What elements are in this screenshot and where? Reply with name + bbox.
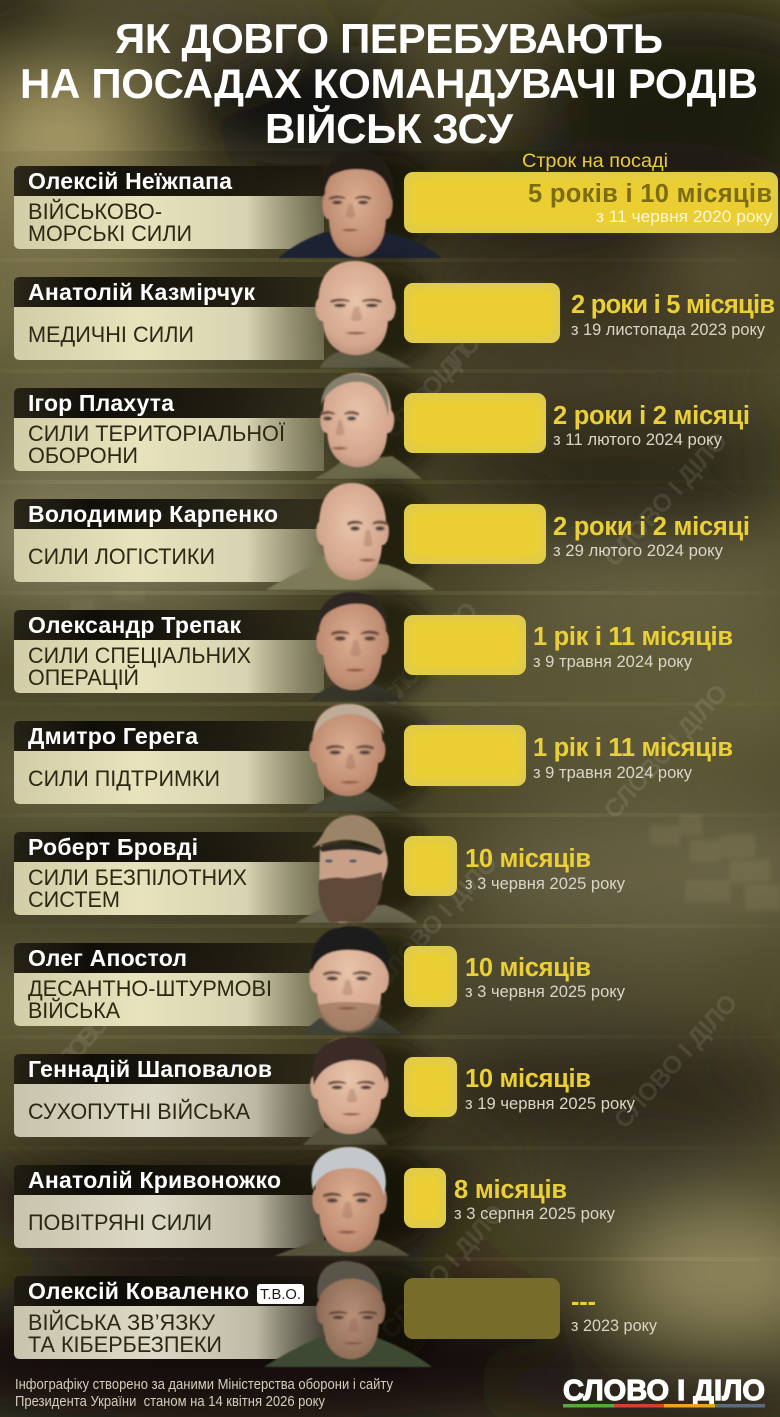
row 4: Karpenko [14,483,750,590]
name bar [14,610,324,640]
service label [14,751,324,804]
service label [14,307,324,360]
service label [14,1084,324,1137]
portrait [314,373,422,479]
name: Дмитро Герега [28,723,198,749]
service: ОБОРОНИ [28,443,138,468]
row 1: Neizhpapa [14,151,778,258]
duration bar [404,836,457,896]
duration bar [404,725,526,786]
service [28,1310,222,1357]
service: СИЛИ СПЕЦІАЛЬНИХ [28,643,251,668]
portrait [296,815,418,923]
duration: 2 роки і 2 місяці [553,513,750,541]
row 2: Kazmirchuk [14,261,775,368]
name: Олексій Неїжпапа [28,168,232,194]
name: Анатолій Казмірчук [28,279,255,305]
duration: 8 місяців [454,1176,567,1204]
watermarks [44,329,743,1344]
service: СУХОПУТНІ ВІЙСЬКА [28,1099,250,1124]
name: Олег Апостол [28,945,187,971]
row 8: Apostol [14,926,626,1034]
duration: 1 рік і 11 місяців [533,623,733,651]
row 10: Kryvonozhko [14,1147,616,1256]
name bar [14,166,324,196]
duration: --- [571,1288,596,1316]
portrait [303,1037,389,1145]
service: СИЛИ ЛОГІСТИКИ [28,544,215,569]
portrait shadow [335,485,435,585]
duration bar [404,504,546,564]
duration: 10 місяців [465,845,591,873]
service label [14,1195,324,1248]
portrait [274,1147,410,1256]
duration bar [404,1278,560,1339]
name: Роберт Бровді [28,834,198,860]
service label [14,862,324,915]
portrait [266,483,435,590]
name bar [14,721,324,751]
duration bar [404,946,457,1007]
title [20,15,758,152]
service: СИЛИ ПІДТРИМКИ [28,766,220,791]
watermarks: СЛОВО І ДІЛО [376,1199,510,1344]
portrait [310,592,402,701]
row 7: Brovdi [14,815,626,923]
row 9: Shapovalov [14,1037,636,1145]
portrait shadow [335,1040,435,1140]
column heading: Строк на посаді [522,150,668,172]
duration: 1 рік і 11 місяців [533,734,733,762]
title: ВІЙСЬК ЗСУ [265,104,514,152]
watermarks: СЛОВО І ДІЛО [599,427,733,572]
watermarks: СЛОВО І ДІЛО [379,329,486,444]
service: ВІЙСЬКОВО- [28,199,162,224]
name: Олексій Коваленко [28,1278,249,1304]
name bar [14,277,324,307]
service: МЕДИЧНІ СИЛИ [28,322,194,347]
service label [14,196,324,249]
date: з 11 червня 2020 року [596,208,773,226]
portrait shadow [335,155,435,255]
title: ЯК ДОВГО ПЕРЕБУВАЮТЬ [115,15,663,62]
service [28,421,286,468]
service [28,199,192,246]
portrait shadow [335,818,435,918]
service [28,865,247,912]
name: Геннадій Шаповалов [28,1056,272,1082]
portrait [303,926,402,1034]
date: з 11 лютого 2024 року [553,431,723,449]
row 6: Gerega [14,704,733,812]
name bar [14,499,324,529]
service [28,976,272,1023]
duration: 10 місяців [465,954,591,982]
service [28,643,251,690]
duration: 5 років і 10 місяців [528,180,772,208]
footer note: Президента України станом на 14 квітня 2026 року [15,1394,326,1410]
portrait shadow [335,375,435,475]
name: Ігор Плахута [28,390,174,416]
duration: 10 місяців [465,1065,591,1093]
service label [14,418,324,471]
service: СИСТЕМ [28,887,120,912]
date: з 9 травня 2024 року [533,764,693,782]
portrait [278,151,442,258]
portrait shadow [335,265,435,365]
duration: 2 роки і 5 місяців [571,291,775,319]
portrait [315,261,412,368]
portrait shadow [335,1265,435,1365]
footer note [15,1377,394,1410]
service label [14,529,324,582]
duration bar [404,393,546,453]
name: Володимир Карпенко [28,501,278,527]
service: ТА КІБЕРБЕЗПЕКИ [28,1332,222,1357]
name: Анатолій Кривоножко [28,1167,281,1193]
watermarks: СЛОВО І ДІЛО [609,989,743,1134]
name bar [14,1165,324,1195]
name bar [14,1054,324,1084]
duration bar [404,1057,457,1117]
portrait shadow [335,706,435,806]
service: ВІЙСЬКА ЗВ’ЯЗКУ [28,1310,216,1335]
date: з 19 листопада 2023 року [571,321,766,339]
portrait [264,1261,432,1367]
row 3: Plakhuta [14,373,750,479]
duration bar [404,1168,446,1228]
watermarks: СЛОВО І ДІЛО [376,597,483,712]
service: ПОВІТРЯНІ СИЛИ [28,1210,212,1235]
portrait [304,704,402,812]
date: з 3 червня 2025 року [465,875,626,893]
name bar [14,388,324,418]
portrait shadow [335,930,435,1030]
service: СИЛИ БЕЗПІЛОТНИХ [28,865,247,890]
watermarks: СЛОВО І ДІЛО [369,849,503,994]
digital camo squares [40,585,780,910]
service label [14,1306,324,1359]
row 5: Trepak [14,592,733,701]
title: НА ПОСАДАХ КОМАНДУВАЧІ РОДІВ [20,60,758,107]
row 11: Kovalenko [14,1261,658,1367]
duration bar [404,615,526,675]
date: з 3 червня 2025 року [465,983,626,1001]
service: ОПЕРАЦІЙ [28,665,139,690]
duration bar [404,172,778,233]
name bar [14,943,324,973]
date: з 9 травня 2024 року [533,653,693,671]
date: з 3 серпня 2025 року [454,1205,616,1223]
watermarks: СЛОВО І ДІЛО [599,679,733,824]
name bar [14,832,324,862]
service: ДЕСАНТНО-ШТУРМОВІ [28,976,272,1001]
footer note: Інфографіку створено за даними Міністерства оборони і сайту [15,1377,394,1393]
name bar [14,1276,324,1306]
portrait shadow [335,1150,435,1250]
date: з 19 червня 2025 року [465,1095,636,1113]
service: СИЛИ ТЕРИТОРІАЛЬНОЇ [28,421,286,446]
portrait shadow [335,595,435,695]
date: з 29 лютого 2024 року [553,542,724,560]
acting badge: Т.В.О. [260,1286,301,1303]
logo: СЛОВО І ДІЛО [563,1375,765,1407]
duration: 2 роки і 2 місяці [553,402,750,430]
name: Олександр Трепак [28,612,241,638]
service label [14,973,324,1026]
watermarks: СЛОВО І ДІЛО [44,969,151,1084]
duration bar [404,283,560,343]
service label [14,640,324,693]
service: ВІЙСЬКА [28,998,120,1023]
service: МОРСЬКІ СИЛИ [28,221,192,246]
date: з 2023 року [571,1317,658,1335]
